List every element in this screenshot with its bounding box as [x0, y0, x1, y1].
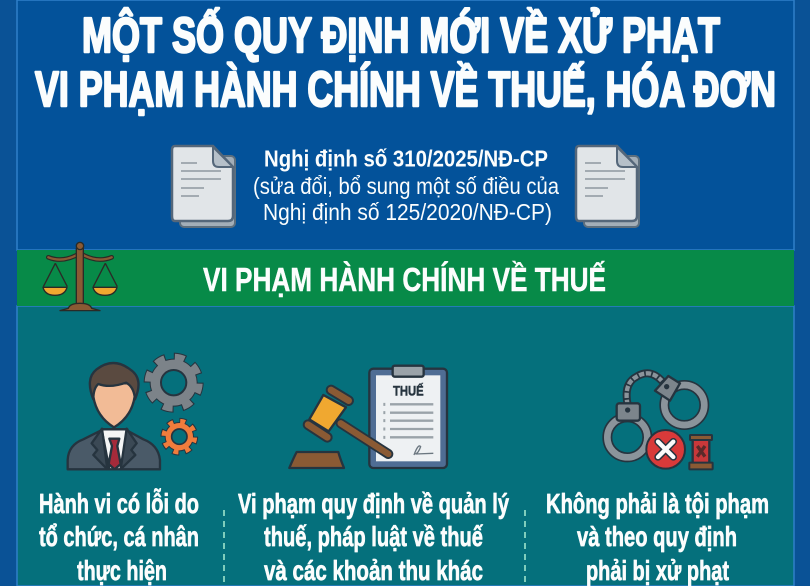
decree text block: (sửa đổi, bổ sung một số điều của	[253, 173, 559, 199]
icon part: gavel head	[309, 395, 346, 431]
column text: tax law violation: Vi phạm quy định về quản lý	[238, 488, 509, 519]
icon: gavel and tax document	[289, 366, 447, 468]
icon part: clipboard: THUẾ	[393, 382, 424, 398]
panel: teal content	[17, 306, 794, 586]
column text: behaviour at fault	[39, 488, 199, 586]
icon part: stamp	[689, 435, 713, 469]
icon part: clipboard	[369, 366, 447, 468]
column text: behaviour at fault: thực hiện	[77, 555, 167, 586]
section heading band: VI PHẠM HÀNH CHÍNH VỀ THUẾ	[203, 261, 606, 298]
icon part: large gear	[149, 358, 198, 407]
icon part: suit	[68, 429, 160, 469]
icon: businessman with gears	[68, 358, 198, 469]
column text: not a crime: phải bị xử phạt	[586, 555, 729, 586]
column text: tax law violation	[238, 488, 509, 586]
icon: scales	[43, 242, 117, 311]
icon: document left	[172, 146, 235, 227]
icon part: sound block	[289, 452, 344, 468]
panel: header	[17, 0, 794, 250]
icon part: lower cuff	[607, 403, 647, 457]
icon: handcuffs	[607, 373, 713, 469]
decree text block	[253, 146, 559, 225]
column text: not a crime	[546, 488, 769, 586]
decree text block: Nghị định số 310/2025/NĐ-CP	[264, 146, 548, 172]
column text: tax law violation: thuế, pháp luật về thuế	[264, 521, 483, 552]
column divider	[223, 510, 225, 586]
icon part: red cross badge	[646, 430, 685, 469]
icon part: head	[92, 383, 137, 427]
title	[35, 8, 776, 117]
icon part: small gear	[164, 421, 195, 452]
column text: not a crime: và theo quy định	[577, 521, 737, 552]
icon part: upper cuff	[655, 376, 704, 425]
decree text block: Nghị định số 125/2020/NĐ-CP)	[263, 199, 552, 225]
icon: document right	[576, 146, 639, 227]
icon part: handle	[341, 423, 388, 454]
icon part: chain	[627, 373, 662, 405]
column text: behaviour at fault: Hành vi có lỗi do	[39, 488, 199, 519]
section heading band	[17, 250, 794, 306]
column text: behaviour at fault: tổ chức, cá nhân	[39, 521, 199, 552]
column divider	[524, 510, 526, 586]
column text: tax law violation: và các khoản thu khác	[264, 555, 483, 586]
